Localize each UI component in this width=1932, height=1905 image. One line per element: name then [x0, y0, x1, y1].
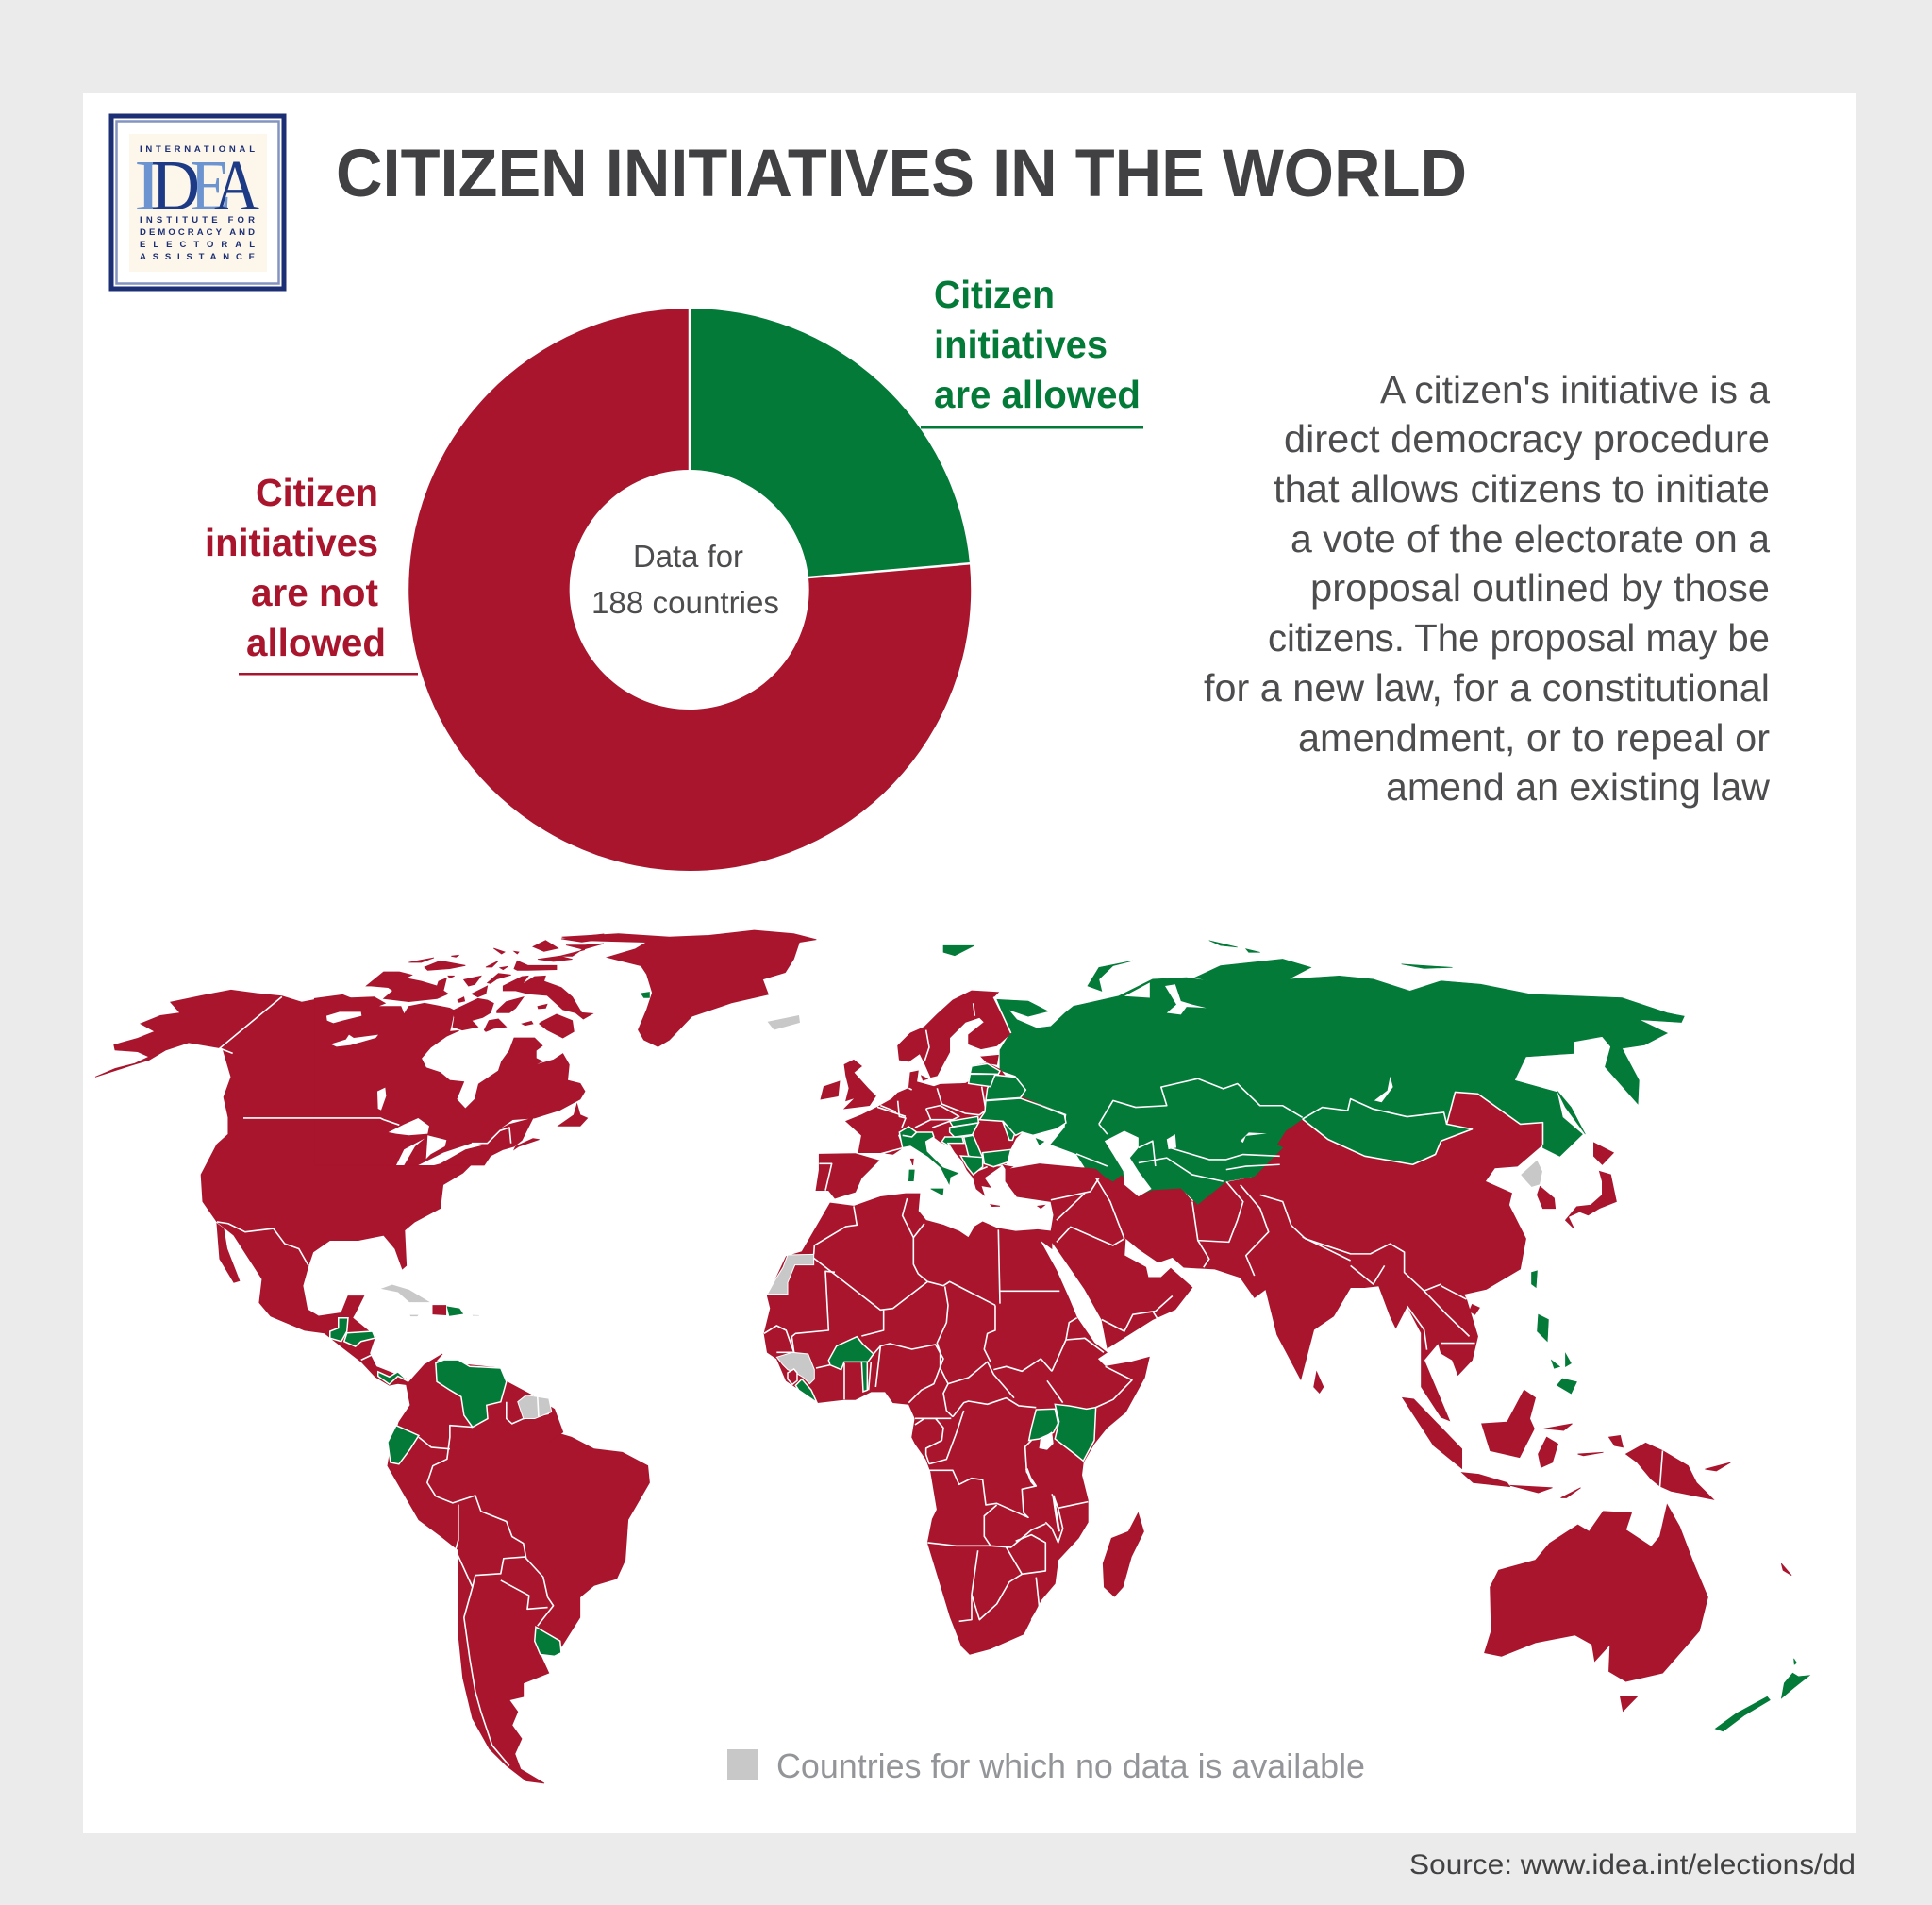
Australia: [1485, 1505, 1707, 1681]
icon: International IDEA logo: D: [151, 146, 200, 226]
Greenland: [562, 930, 816, 1046]
no data: Western Sahara, Guinea: [767, 1254, 814, 1295]
green countries in Africa: [795, 1337, 1096, 1461]
Japan: [1593, 1143, 1613, 1164]
Sierra Leone: [788, 1369, 797, 1384]
seas and lakes: [1105, 982, 1393, 1196]
text block: definition: proposal outlined by those: [1310, 566, 1770, 610]
map: USA, Alaska, Western Canada, Mexico, Central America, Greenland: [95, 930, 816, 1385]
text block: definition: a vote of the electorate on a: [1291, 517, 1770, 560]
callout: citizen initiatives are not allowed: [205, 471, 418, 676]
text block: definition: A citizen's initiative is a: [1380, 368, 1770, 411]
map: Asia, Middle East: [943, 941, 1684, 1421]
icon: International IDEA logo: INTERNATIONAL: [140, 144, 255, 155]
callout: citizen initiatives are allowed: initiatives: [934, 323, 1108, 366]
Spain, Portugal: [816, 1154, 879, 1198]
Estonia, Denmark: [981, 1055, 998, 1064]
source note: Source: www.idea.int/elections/dd: [1409, 1849, 1856, 1880]
callout: citizen initiatives are allowed: [921, 273, 1143, 428]
donut segment: not allowed: [408, 309, 971, 871]
borders: [217, 996, 375, 1360]
donut centre label: Data for: [633, 539, 743, 574]
map: South America: [388, 1354, 1143, 1783]
Scandinavia: [898, 991, 1011, 1078]
green: Central America and Caribbean: [330, 992, 649, 1384]
United Kingdom and Ireland: [844, 1060, 875, 1109]
no data: Caribbean, Iceland: [378, 1014, 801, 1317]
New Zealand: [1781, 1673, 1809, 1698]
icon: International IDEA logo: ASSISTANCE: [140, 252, 255, 262]
Madagascar: [1103, 1513, 1143, 1596]
continental Europe: [846, 1063, 1066, 1195]
callout: citizen initiatives are allowed: are allowed: [934, 373, 1141, 416]
Turkish Thrace, Cyprus, Crete: [1003, 1165, 1012, 1170]
Canada-USA border: [243, 1118, 511, 1144]
map: Europe: [816, 991, 1066, 1209]
world map: [95, 930, 1809, 1783]
north Korea no data: [1520, 1160, 1542, 1188]
Russia and central Asia: [997, 959, 1684, 1204]
icon: International IDEA logo: [111, 116, 284, 289]
text block: definition: amend an existing law: [1386, 765, 1770, 809]
icon: International IDEA logo: DEMOCRACY AND: [140, 227, 255, 238]
icon: International IDEA logo: E: [190, 146, 231, 226]
icon: International IDEA logo: A: [214, 146, 259, 226]
map: Oceania and South-East Asian islands: [1403, 1390, 1809, 1731]
donut segment: allowed: [690, 309, 970, 577]
text block: definition: amendment, or to repeal or: [1298, 716, 1770, 760]
lakes: [1040, 1431, 1054, 1450]
icon: International IDEA logo: I: [134, 146, 162, 226]
donut centre label: [591, 539, 779, 620]
text block: definition: citizens. The proposal may be: [1268, 616, 1770, 660]
islands: [366, 934, 604, 1038]
legend: no data available: Countries for which no data is available: [776, 1746, 1365, 1785]
Lesotho, Swaziland: [1009, 1617, 1023, 1629]
callout: citizen initiatives are not allowed: allowed: [246, 621, 386, 664]
text block: definition: for a new law, for a constitutional: [1204, 666, 1770, 710]
icon: International IDEA logo: INSTITUTE FOR: [140, 215, 255, 226]
map: Africa: [764, 1194, 1149, 1654]
map: Eastern Canada and Arctic islands: [243, 934, 604, 1165]
title: CITIZEN INITIATIVES IN THE WORLD: [336, 137, 1467, 211]
donut centre label: 188 countries: [591, 585, 779, 620]
New Caledonia: [1781, 1563, 1791, 1576]
text block: definition: direct democracy procedure: [1284, 417, 1770, 460]
callout: citizen initiatives are allowed: Citizen: [934, 273, 1055, 316]
text block: definition: that allows citizens to initiate: [1274, 467, 1770, 510]
borders: [1051, 1177, 1475, 1350]
donut chart: [408, 307, 973, 871]
Baja California: [217, 1224, 240, 1282]
Switzerland, Italy and islands: [899, 1127, 960, 1187]
callout: citizen initiatives are not allowed: are not: [251, 571, 378, 614]
callout: citizen initiatives are not allowed: Citizen: [256, 471, 378, 514]
borders: [764, 1198, 1132, 1621]
icon: International IDEA logo: ELECTORAL: [140, 240, 255, 250]
South Korea: [1537, 1186, 1556, 1209]
former Soviet borders: [1076, 1078, 1542, 1181]
Sri Lanka, Hainan, islands: [1314, 1372, 1324, 1393]
callout: citizen initiatives are not allowed: initiatives: [205, 521, 378, 564]
lakes: [326, 1011, 484, 1165]
text block: definition: [1204, 368, 1770, 809]
Balkans and Eastern Europe: [941, 1063, 1066, 1175]
green islands: [943, 941, 1585, 1394]
